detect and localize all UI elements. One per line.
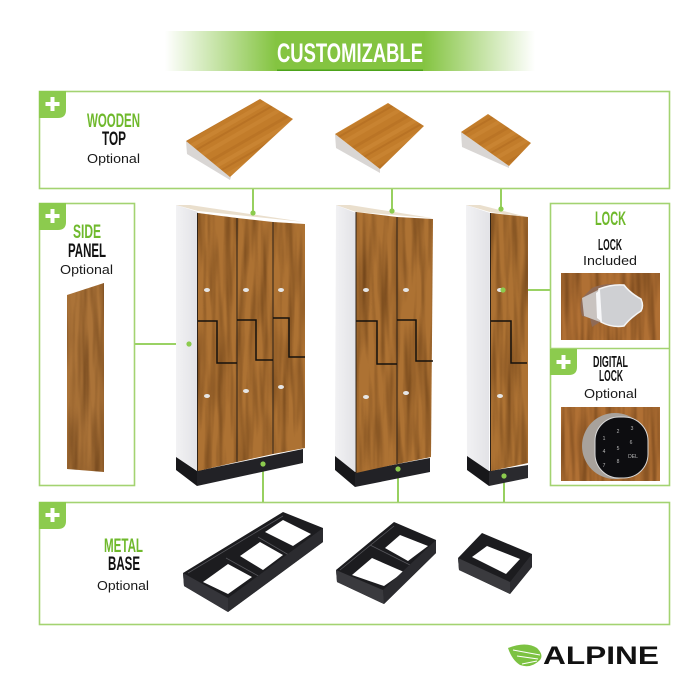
door locks — [497, 288, 503, 398]
digital lock photo: 3 — [631, 426, 634, 432]
heading: digital lock — [584, 354, 637, 401]
digital lock photo: 8 — [617, 459, 620, 465]
locker side — [466, 205, 490, 471]
door locks — [204, 288, 284, 398]
small metal base — [458, 533, 532, 594]
large wooden top — [186, 99, 293, 180]
digital lock photo — [561, 407, 660, 481]
two-column locker — [335, 205, 433, 487]
icon: plus badge — [39, 91, 66, 118]
heading: wooden top: WOODEN — [87, 111, 140, 132]
heading: lock: LOCK — [595, 209, 626, 230]
doors — [356, 212, 433, 473]
heading: side panel: PANEL — [68, 241, 106, 262]
metal base — [467, 456, 528, 486]
icon: plus badge — [550, 349, 577, 375]
panel: metal base — [39, 502, 670, 624]
large metal base — [183, 512, 323, 612]
digital lock photo: 7 — [603, 463, 606, 469]
lock photo — [561, 273, 660, 340]
heading: lock: LOCK — [598, 237, 622, 254]
heading: side panel — [60, 222, 113, 277]
heading: digital lock: LOCK — [599, 368, 623, 385]
doors — [198, 213, 305, 471]
connector lines — [134, 188, 550, 502]
heading: side panel: Optional — [60, 262, 113, 277]
digital lock photo: 6 — [630, 440, 633, 446]
heading: digital lock: Optional — [584, 386, 637, 401]
locker top cap — [336, 205, 432, 218]
digital lock photo: 1 — [603, 436, 606, 442]
connector dots — [186, 206, 507, 479]
heading: metal base: Optional — [97, 578, 149, 593]
locker top cap — [176, 205, 304, 222]
icon: leaf — [508, 644, 541, 666]
logo: Alpine — [508, 642, 659, 670]
panel: lock — [550, 204, 670, 486]
metal base — [176, 449, 303, 486]
medium metal base — [336, 522, 436, 604]
heading: wooden top: TOP — [102, 129, 126, 150]
locker side — [335, 205, 356, 472]
icon: plus badge — [39, 203, 66, 230]
heading: wooden top: Optional — [87, 151, 140, 166]
small wooden top — [461, 114, 531, 168]
digital lock photo: 2 — [617, 429, 620, 435]
metal base — [335, 456, 430, 487]
logo: Alpine: ALPINE — [543, 642, 659, 670]
panel: wooden top — [39, 91, 670, 188]
digital lock photo: 4 — [603, 449, 606, 455]
heading: digital lock: DIGITAL — [593, 354, 628, 371]
heading: metal base: METAL — [104, 536, 143, 557]
icon: plus badge — [39, 502, 66, 529]
locker top cap — [466, 205, 527, 217]
heading: lock — [583, 209, 637, 268]
heading: metal base — [97, 536, 149, 593]
heading: metal base: BASE — [108, 554, 140, 575]
door locks — [363, 288, 409, 399]
digital lock photo: 5 — [617, 446, 620, 452]
locker side — [176, 205, 198, 471]
side panel wood board — [67, 283, 104, 472]
heading: lock: Included — [583, 253, 637, 268]
heading: side panel: SIDE — [73, 222, 101, 243]
door — [490, 213, 528, 471]
digital lock photo: DEL — [628, 454, 638, 460]
panel: side panel — [39, 203, 134, 486]
title banner — [165, 31, 535, 71]
title banner: CUSTOMIZABLE — [277, 38, 423, 68]
three-column locker — [176, 205, 305, 486]
one-column locker — [466, 205, 528, 486]
medium wooden top — [335, 103, 424, 173]
heading: wooden top — [87, 111, 140, 166]
